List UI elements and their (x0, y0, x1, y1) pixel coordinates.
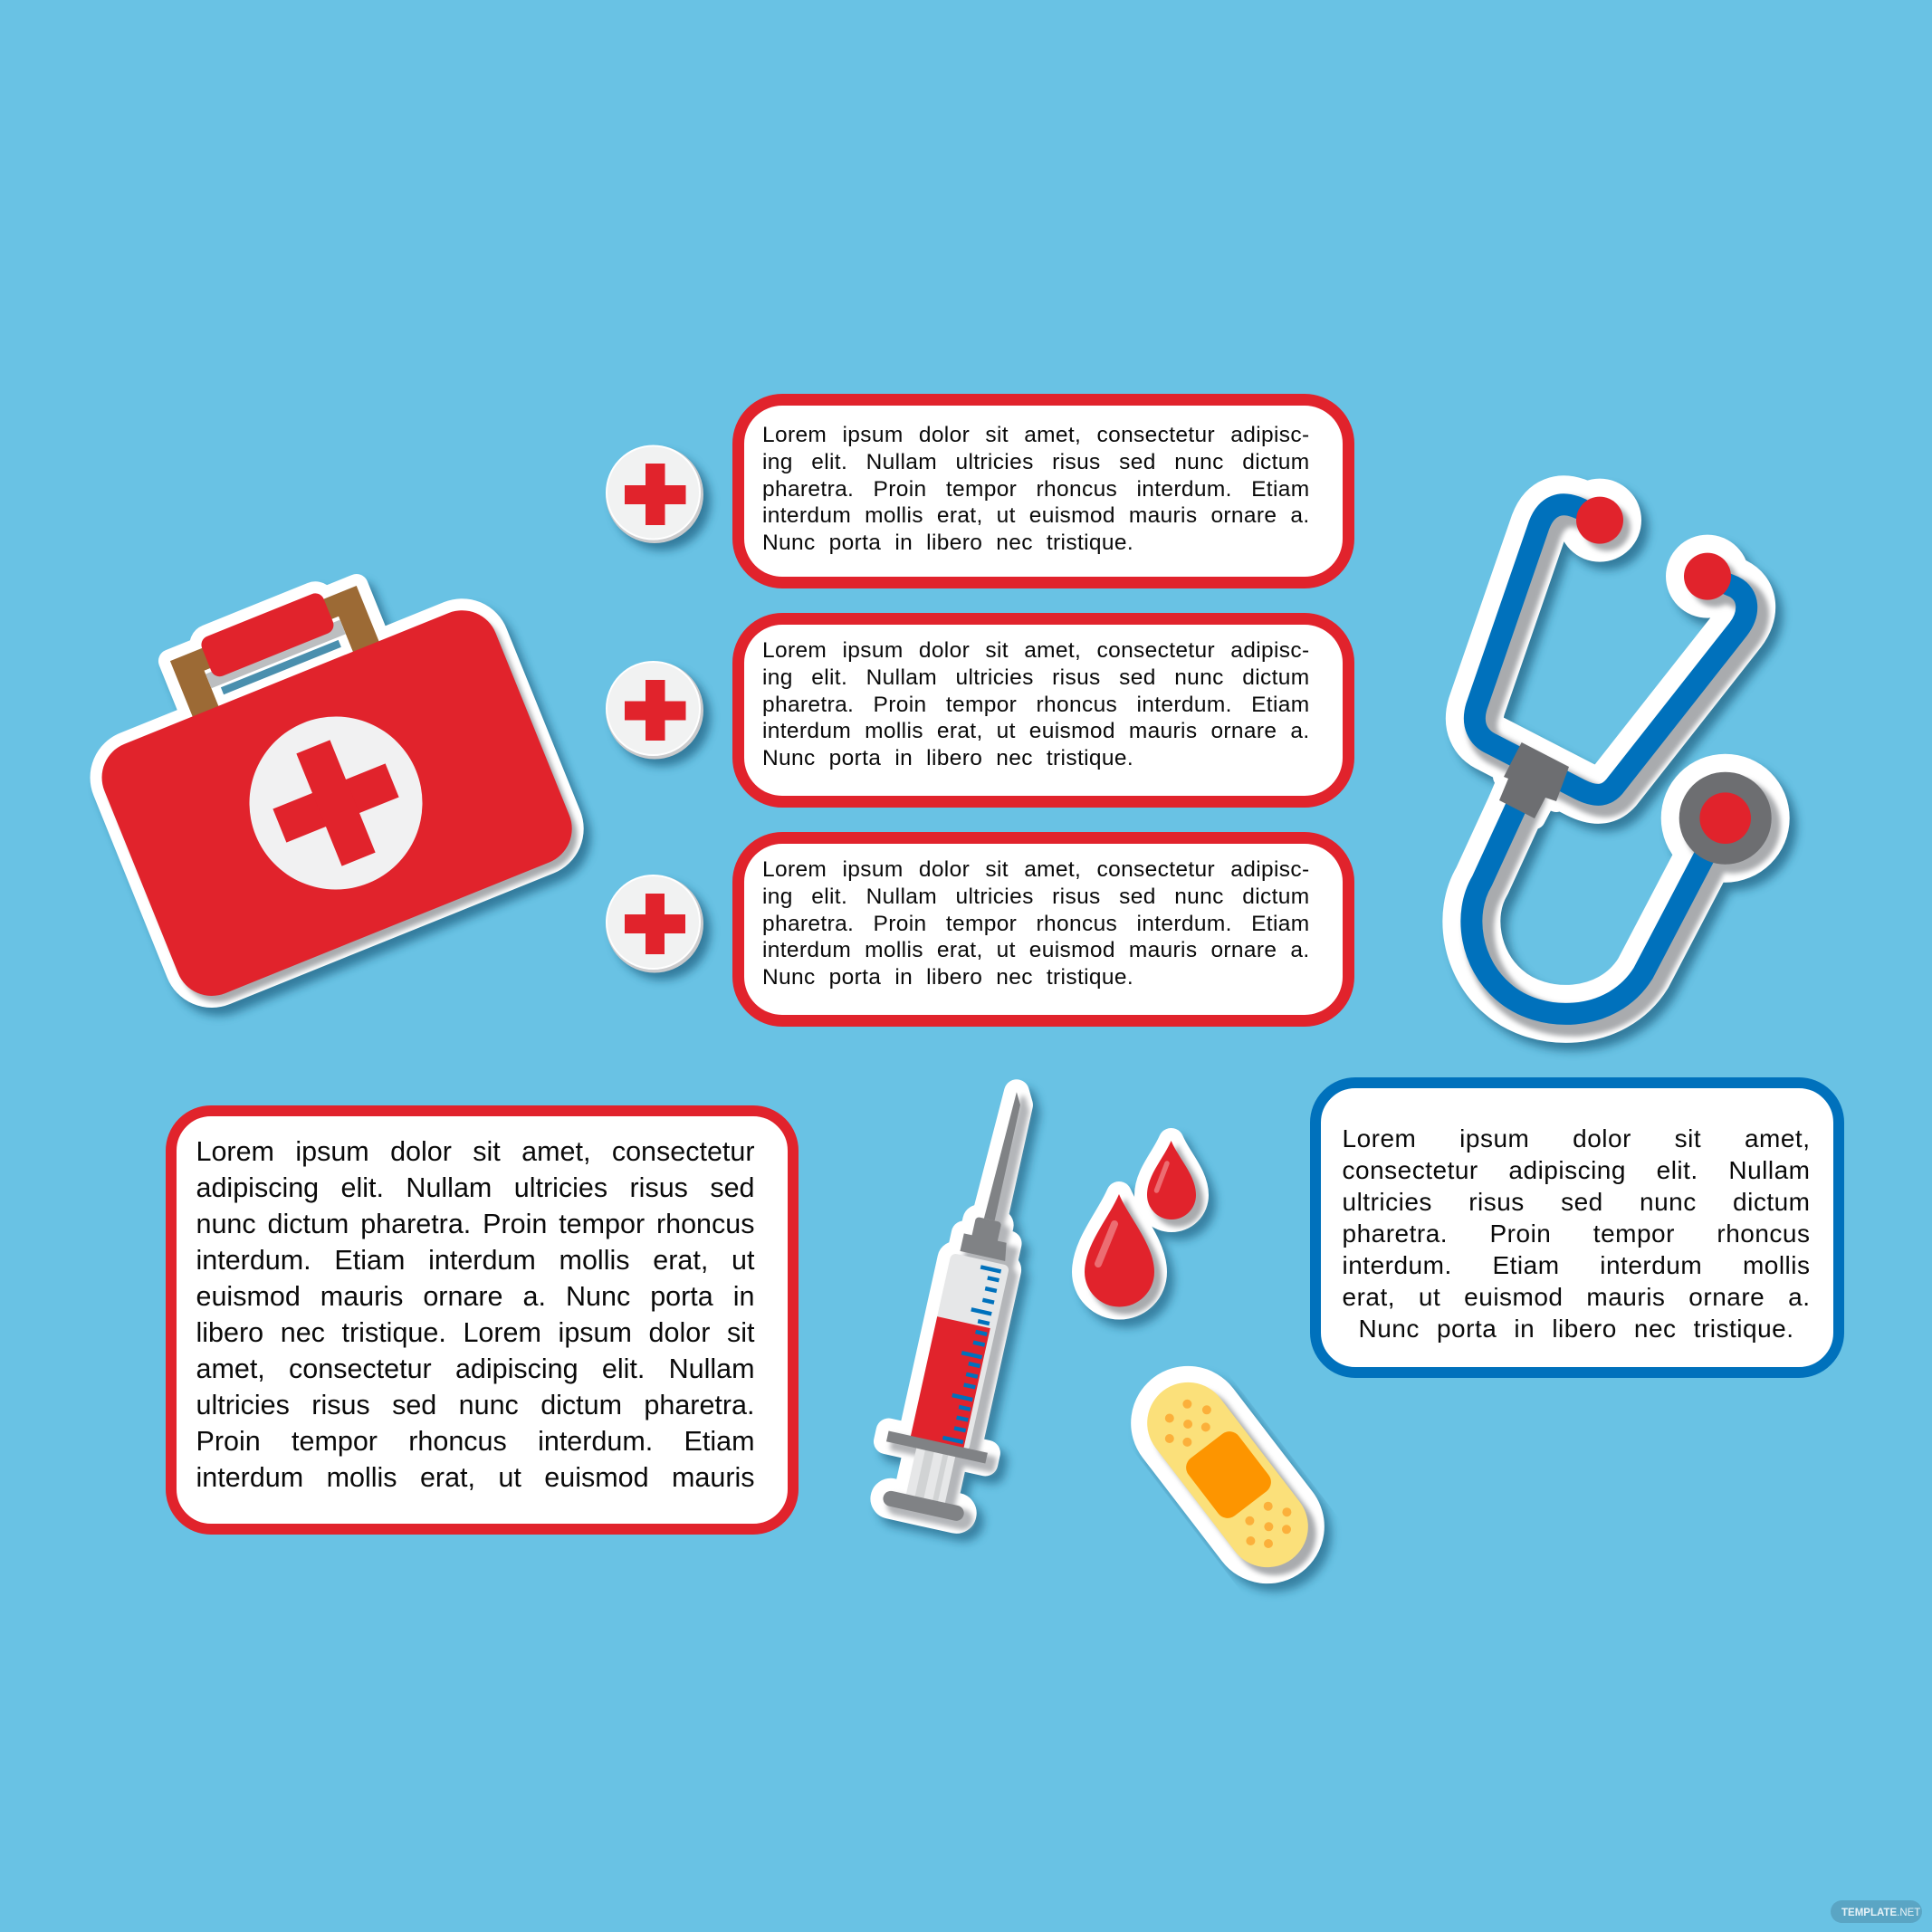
text block 2 (762, 638, 1309, 770)
text block: large: euismod mauris ornare a. Nunc porta in (196, 1281, 755, 1312)
panel: large red text box (166, 1105, 799, 1535)
chest piece (1679, 772, 1772, 865)
text block: large (196, 1136, 755, 1493)
icon: plus badge 3 (606, 875, 711, 980)
text block: large: ultricies risus sed nunc dictum pharetra. (196, 1390, 755, 1420)
panel: blue text box (1310, 1077, 1844, 1378)
text block: blue box: ultricies risus sed nunc dictum (1342, 1188, 1811, 1216)
text block 3: Lorem ipsum dolor sit amet, consectetur adipisc- (762, 857, 1309, 882)
panel: red text box 1 (732, 394, 1354, 588)
text block 2: Lorem ipsum dolor sit amet, consectetur adipisc- (762, 638, 1309, 663)
earpieces (1576, 497, 1731, 600)
icon: bandage (1131, 1366, 1332, 1592)
text block: blue box: interdum. Etiam interdum mollis (1342, 1251, 1811, 1279)
text block 3: interdum mollis erat, ut euismod mauris ornare a. (762, 938, 1309, 962)
watermark badge: TEMPLATE.NET (1841, 1908, 1920, 1918)
text block: large: libero nec tristique. Lorem ipsum dolor sit (196, 1317, 755, 1348)
text block 3 (762, 857, 1309, 990)
text block: large: nunc dictum pharetra. Proin tempor rhoncus (196, 1209, 755, 1239)
panel: red text box 3 (732, 832, 1354, 1027)
text block 1: Lorem ipsum dolor sit amet, consectetur adipisc- (762, 423, 1309, 447)
text block 3: Nunc porta in libero nec tristique. (762, 965, 1133, 990)
text block 1: pharetra. Proin tempor rhoncus interdum. Etiam (762, 476, 1309, 502)
text block 2: interdum mollis erat, ut euismod mauris ornare a. (762, 719, 1309, 743)
text block: blue box: Nunc porta in libero nec tristique. (1358, 1315, 1794, 1343)
text block: blue box (1342, 1124, 1811, 1343)
text block: large: Proin tempor rhoncus interdum. Etiam (196, 1426, 755, 1457)
text block: blue box: Lorem ipsum dolor sit amet, (1342, 1124, 1811, 1153)
icon: stethoscope (1471, 479, 1797, 1022)
watermark badge (1831, 1900, 1922, 1923)
icon: syringe (873, 1081, 1073, 1533)
text block 1: interdum mollis erat, ut euismod mauris ornare a. (762, 503, 1309, 528)
text block 1: Nunc porta in libero nec tristique. (762, 531, 1133, 555)
icon: blood drops (1085, 1141, 1203, 1315)
text block 1: ing elit. Nullam ultricies risus sed nunc dictum (762, 450, 1309, 474)
icon: first aid kit (65, 536, 590, 1015)
text block 3: ing elit. Nullam ultricies risus sed nunc dictum (762, 885, 1309, 909)
text block: large: interdum. Etiam interdum mollis erat, ut (196, 1245, 755, 1276)
text block: blue box: erat, ut euismod mauris ornare a. (1342, 1283, 1811, 1311)
text block 2: pharetra. Proin tempor rhoncus interdum. Etiam (762, 692, 1309, 717)
text block 2: Nunc porta in libero nec tristique. (762, 746, 1133, 770)
panel: red text box 2 (732, 613, 1354, 808)
text block: large: Lorem ipsum dolor sit amet, consectetur (196, 1136, 755, 1167)
text block 1 (762, 423, 1309, 555)
text block: blue box: consectetur adipiscing elit. Nullam (1342, 1156, 1811, 1184)
text block: blue box: pharetra. Proin tempor rhoncus (1342, 1219, 1811, 1248)
text block: large: adipiscing elit. Nullam ultricies risus sed (196, 1172, 755, 1203)
connector (1499, 742, 1569, 818)
text block: large: amet, consectetur adipiscing elit. Nullam (196, 1353, 755, 1384)
text block: large: interdum mollis erat, ut euismod mauris (196, 1462, 755, 1493)
text block 2: ing elit. Nullam ultricies risus sed nunc dictum (762, 665, 1309, 690)
text block 3: pharetra. Proin tempor rhoncus interdum. Etiam (762, 911, 1309, 936)
icon: plus badge 1 (606, 445, 711, 550)
icon: plus badge 2 (606, 661, 711, 766)
